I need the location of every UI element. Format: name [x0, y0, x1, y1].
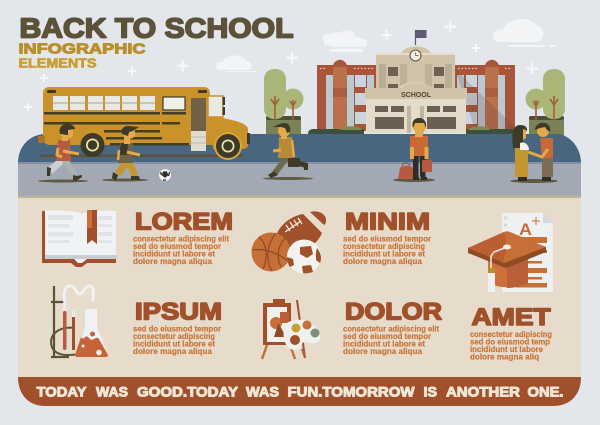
heading: ipsum: [133, 298, 222, 356]
footer banner: TODAY: [36, 384, 87, 400]
heading: dolor: DOLOR: [345, 298, 442, 326]
heading: dolor: sed do eiusmod tempor: [343, 332, 432, 341]
school building: [308, 30, 520, 134]
heading: lorem: sed do eiusmod tempor: [133, 242, 222, 251]
heading: amet: [470, 304, 552, 362]
background tree planter right: [526, 69, 565, 139]
heading: ipsum: consectetur adipiscing: [133, 332, 215, 341]
heading: amet: incididunt ut labore: [470, 345, 543, 354]
heading: minim: dolore magna aliqua: [343, 257, 422, 266]
school bus: [38, 87, 250, 160]
entrance block: [366, 82, 466, 133]
title: BACK TO SCHOOL: [20, 12, 294, 44]
heading: minim: incididunt ut labore et: [343, 250, 425, 258]
footer banner: IS: [424, 384, 437, 400]
mother and child: [510, 123, 558, 183]
heading: ipsum: sed do eiusmod tempor: [133, 324, 222, 334]
cloud left: [216, 55, 256, 72]
bus windows: [53, 96, 155, 110]
heading: lorem: incididunt ut labore et: [133, 250, 215, 258]
standing student with bags: [393, 118, 435, 182]
heading: lorem: dolore magna aliqua: [133, 257, 212, 266]
child running olive: [102, 126, 148, 182]
street panel: [18, 134, 581, 198]
soccer ball on road: [159, 169, 171, 181]
heading: ipsum: incididunt ut labore et: [133, 340, 215, 348]
heading: ipsum: dolore magna aliqua: [133, 347, 212, 356]
child running with bag: [263, 123, 313, 180]
bus wheels: [80, 133, 104, 157]
cloud right: [493, 19, 556, 47]
heading: amet: consectetur adipiscing: [470, 330, 552, 339]
heading: lorem: LOREM: [135, 208, 233, 236]
heading: dolor: consectetur adipiscing elit: [343, 324, 439, 334]
flag: [414, 30, 416, 45]
heading: dolor: dolore magna aliqua: [343, 347, 422, 356]
heading: ipsum: IPSUM: [135, 298, 222, 326]
right wing: [455, 60, 515, 131]
heading: minim: sed do eiusmod tempor: [343, 234, 432, 244]
bus stripes: [44, 112, 189, 146]
heading: lorem: consectetur adipiscing elit: [133, 234, 229, 244]
footer banner: ANOTHER: [446, 384, 520, 400]
content panel: [18, 198, 581, 378]
school building: SCHOOL: [401, 92, 432, 99]
heading: minim: MINIM: [345, 208, 430, 236]
sky sparkles: [24, 21, 538, 111]
footer banner: [18, 377, 581, 406]
icon: graduation cap and paper: [468, 213, 553, 292]
central tower: [376, 46, 455, 90]
hedges: [308, 129, 364, 134]
left wing: [317, 60, 377, 131]
icon: laboratory glassware: [51, 286, 108, 357]
footer banner: WAS: [246, 384, 279, 400]
clock: [410, 50, 421, 61]
footer banner: FUN.TOMORROW: [288, 384, 415, 400]
heading: minim: consectetur adipiscing: [343, 242, 425, 251]
cloud middle: [323, 30, 367, 52]
background tree planter left: [264, 69, 304, 139]
heading: dolor: incididunt ut labore et: [343, 340, 425, 348]
title: ELEMENTS: [18, 56, 96, 70]
heading: amet: sed do eiusmod temp: [470, 338, 550, 346]
footer banner: ONE.: [528, 384, 564, 400]
cab window frame: [208, 96, 223, 117]
footer banner: WAS: [96, 384, 128, 400]
icon: sports balls: [252, 211, 326, 274]
title: INFOGRAPHIC: [18, 40, 146, 58]
icon: easel and palette: [262, 299, 320, 359]
heading: dolor: [343, 298, 442, 356]
icon: open book: [42, 210, 117, 267]
child running red: [38, 124, 88, 182]
heading: minim: [343, 208, 432, 266]
icon: graduation cap and paper: A: [519, 220, 532, 239]
heading: lorem: [133, 208, 233, 266]
title: [18, 12, 294, 70]
footer banner: GOOD.TODAY: [137, 384, 239, 400]
heading: amet: dolore magna aliq: [470, 352, 539, 362]
heading: amet: AMET: [472, 304, 551, 331]
